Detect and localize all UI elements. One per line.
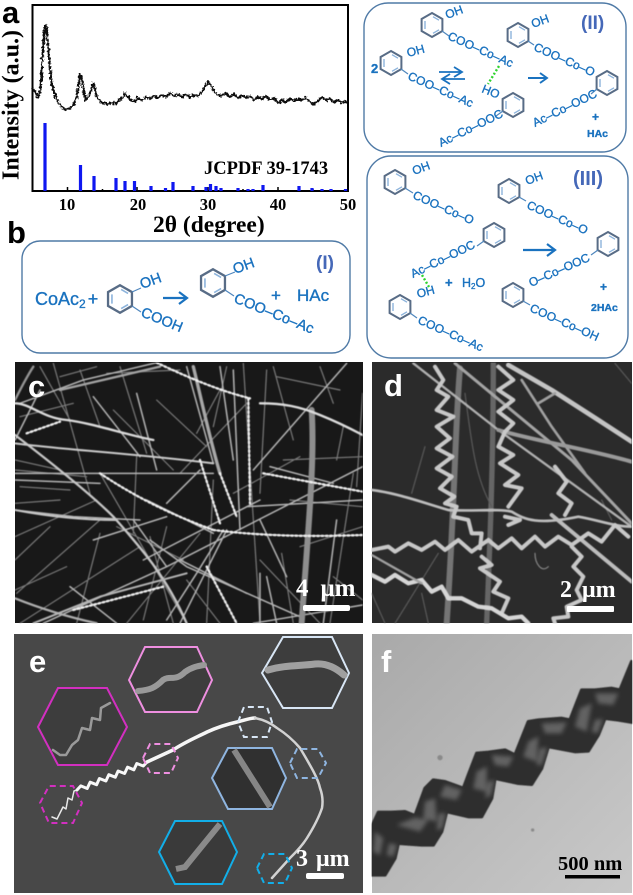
molecule bottom: HO — [480, 82, 502, 102]
measured XRD curve — [33, 25, 348, 110]
left bottom molecule — [390, 283, 485, 354]
product: COO–Co–Ac — [232, 291, 316, 337]
numeral I: (I) — [316, 253, 334, 274]
molecule top: OH — [443, 3, 465, 22]
twisted ribbon — [372, 662, 633, 875]
left dimer: OH — [410, 159, 432, 178]
arrow — [163, 292, 187, 304]
x tick labels: 10 — [59, 195, 75, 214]
label e: e — [29, 644, 46, 679]
CoAc2 reactant: 2 — [79, 297, 86, 311]
right trimer: OH — [523, 169, 545, 188]
molecule bottom: Ac–Co–OOC — [436, 106, 506, 150]
plus HAc: + — [592, 110, 599, 124]
hexagon inset magenta — [38, 688, 127, 765]
equilibrium arrows — [439, 67, 465, 84]
scale bar — [567, 606, 614, 612]
scale text: 2 μm — [560, 577, 616, 603]
panel b reaction III: H — [462, 276, 471, 290]
box I — [22, 241, 350, 353]
reference stick pattern JCPDF 39-1743 — [45, 123, 346, 191]
hexagon inset cyan — [159, 821, 237, 884]
right trimer: COO–Co–OH — [528, 301, 601, 344]
x tick labels: 20 — [130, 195, 146, 214]
panel a: XRD chart — [0, 0, 356, 238]
panel b reaction I — [22, 241, 350, 353]
panel c: SEM image of nanofibers — [15, 362, 363, 623]
salicylic acid: COOH — [139, 305, 185, 336]
molecule top — [422, 3, 515, 70]
CoAc2 reactant: CoAc — [35, 289, 79, 309]
x tick labels: 40 — [270, 195, 286, 214]
fibers and coils — [372, 363, 632, 623]
fibers — [15, 363, 363, 623]
scale text: 4 μm — [296, 575, 356, 602]
salicylic acid — [108, 270, 185, 336]
CoAc2 reactant: + — [88, 289, 98, 309]
molecule left: COO–Co–Ac — [406, 69, 475, 110]
panel b reaction III: O — [475, 276, 485, 290]
dimer product — [508, 12, 617, 130]
arrow — [528, 73, 547, 83]
left bottom molecule: OH — [415, 283, 436, 301]
molecule left — [381, 42, 475, 110]
right trimer — [499, 169, 618, 344]
scale bar — [565, 875, 620, 878]
molecule left: OH — [405, 42, 426, 60]
plus water: + — [445, 275, 453, 290]
scale bar — [306, 873, 344, 879]
box III — [367, 156, 628, 358]
panel b reaction III — [367, 156, 628, 358]
panel e: single fiber SEM with hexagon insets — [14, 634, 363, 893]
plot frame — [32, 5, 348, 191]
scale bar — [303, 605, 350, 611]
product — [201, 255, 316, 337]
plus 2HAc: + — [600, 280, 607, 294]
molecule top: COO–Co–Ac — [446, 29, 515, 70]
scale text: 500 nm — [558, 853, 622, 875]
x tick labels — [59, 195, 356, 214]
plus HAc: + — [271, 286, 281, 305]
main helical-to-straight fiber — [52, 718, 323, 878]
panel b reaction III: 2HAc — [591, 302, 618, 314]
hexagon inset blue — [212, 748, 286, 809]
product: OH — [231, 255, 257, 278]
panel f: TEM image of helical ribbon — [372, 634, 633, 893]
x tick labels: 50 — [340, 195, 356, 214]
panel b reaction II — [364, 3, 626, 152]
hydrogen bond — [422, 275, 429, 287]
box II — [364, 3, 626, 152]
dashed locator hexagons — [40, 707, 326, 883]
panel b reaction II: HAc — [587, 128, 608, 140]
numeral II: (II) — [581, 13, 604, 34]
arrow — [523, 244, 555, 256]
salicylic acid: OH — [138, 270, 164, 293]
debris — [437, 755, 534, 832]
panel b reaction III: 2 — [471, 282, 476, 291]
label b: b — [7, 215, 26, 250]
label c: c — [28, 369, 45, 404]
x axis title: 2θ (degree) — [153, 212, 265, 238]
right trimer: COO–Co–O — [525, 198, 590, 237]
left bottom molecule: COO–Co–Ac — [416, 313, 485, 354]
label f: f — [381, 644, 392, 679]
hydrogen bond — [488, 66, 499, 84]
x tick labels: 30 — [200, 195, 216, 214]
dimer product: Ac–Co–OOC — [530, 86, 600, 130]
label d: d — [384, 368, 403, 403]
right trimer: O–Co–OOC — [527, 250, 592, 290]
left dimer: Ac–Co–OOC — [408, 237, 478, 281]
coefficient 2: 2 — [371, 61, 378, 76]
left dimer: COO–Co–O — [411, 188, 476, 227]
panel b reaction I: HAc — [297, 286, 330, 305]
dimer product: OH — [529, 12, 551, 31]
panel d: SEM image of helical fibers — [372, 362, 632, 623]
reference label: JCPDF 39-1743 — [204, 159, 328, 179]
dimer product: COO–Co–O — [532, 40, 597, 79]
numeral III: (III) — [573, 168, 603, 190]
axis ticks — [68, 187, 313, 191]
molecule bottom — [436, 82, 523, 150]
hexagon inset pale blue — [262, 637, 349, 708]
left dimer — [385, 159, 504, 281]
hexagon inset pink — [129, 647, 212, 712]
scale text: 3 μm — [296, 846, 350, 872]
ribbon tonal variation — [373, 693, 618, 857]
